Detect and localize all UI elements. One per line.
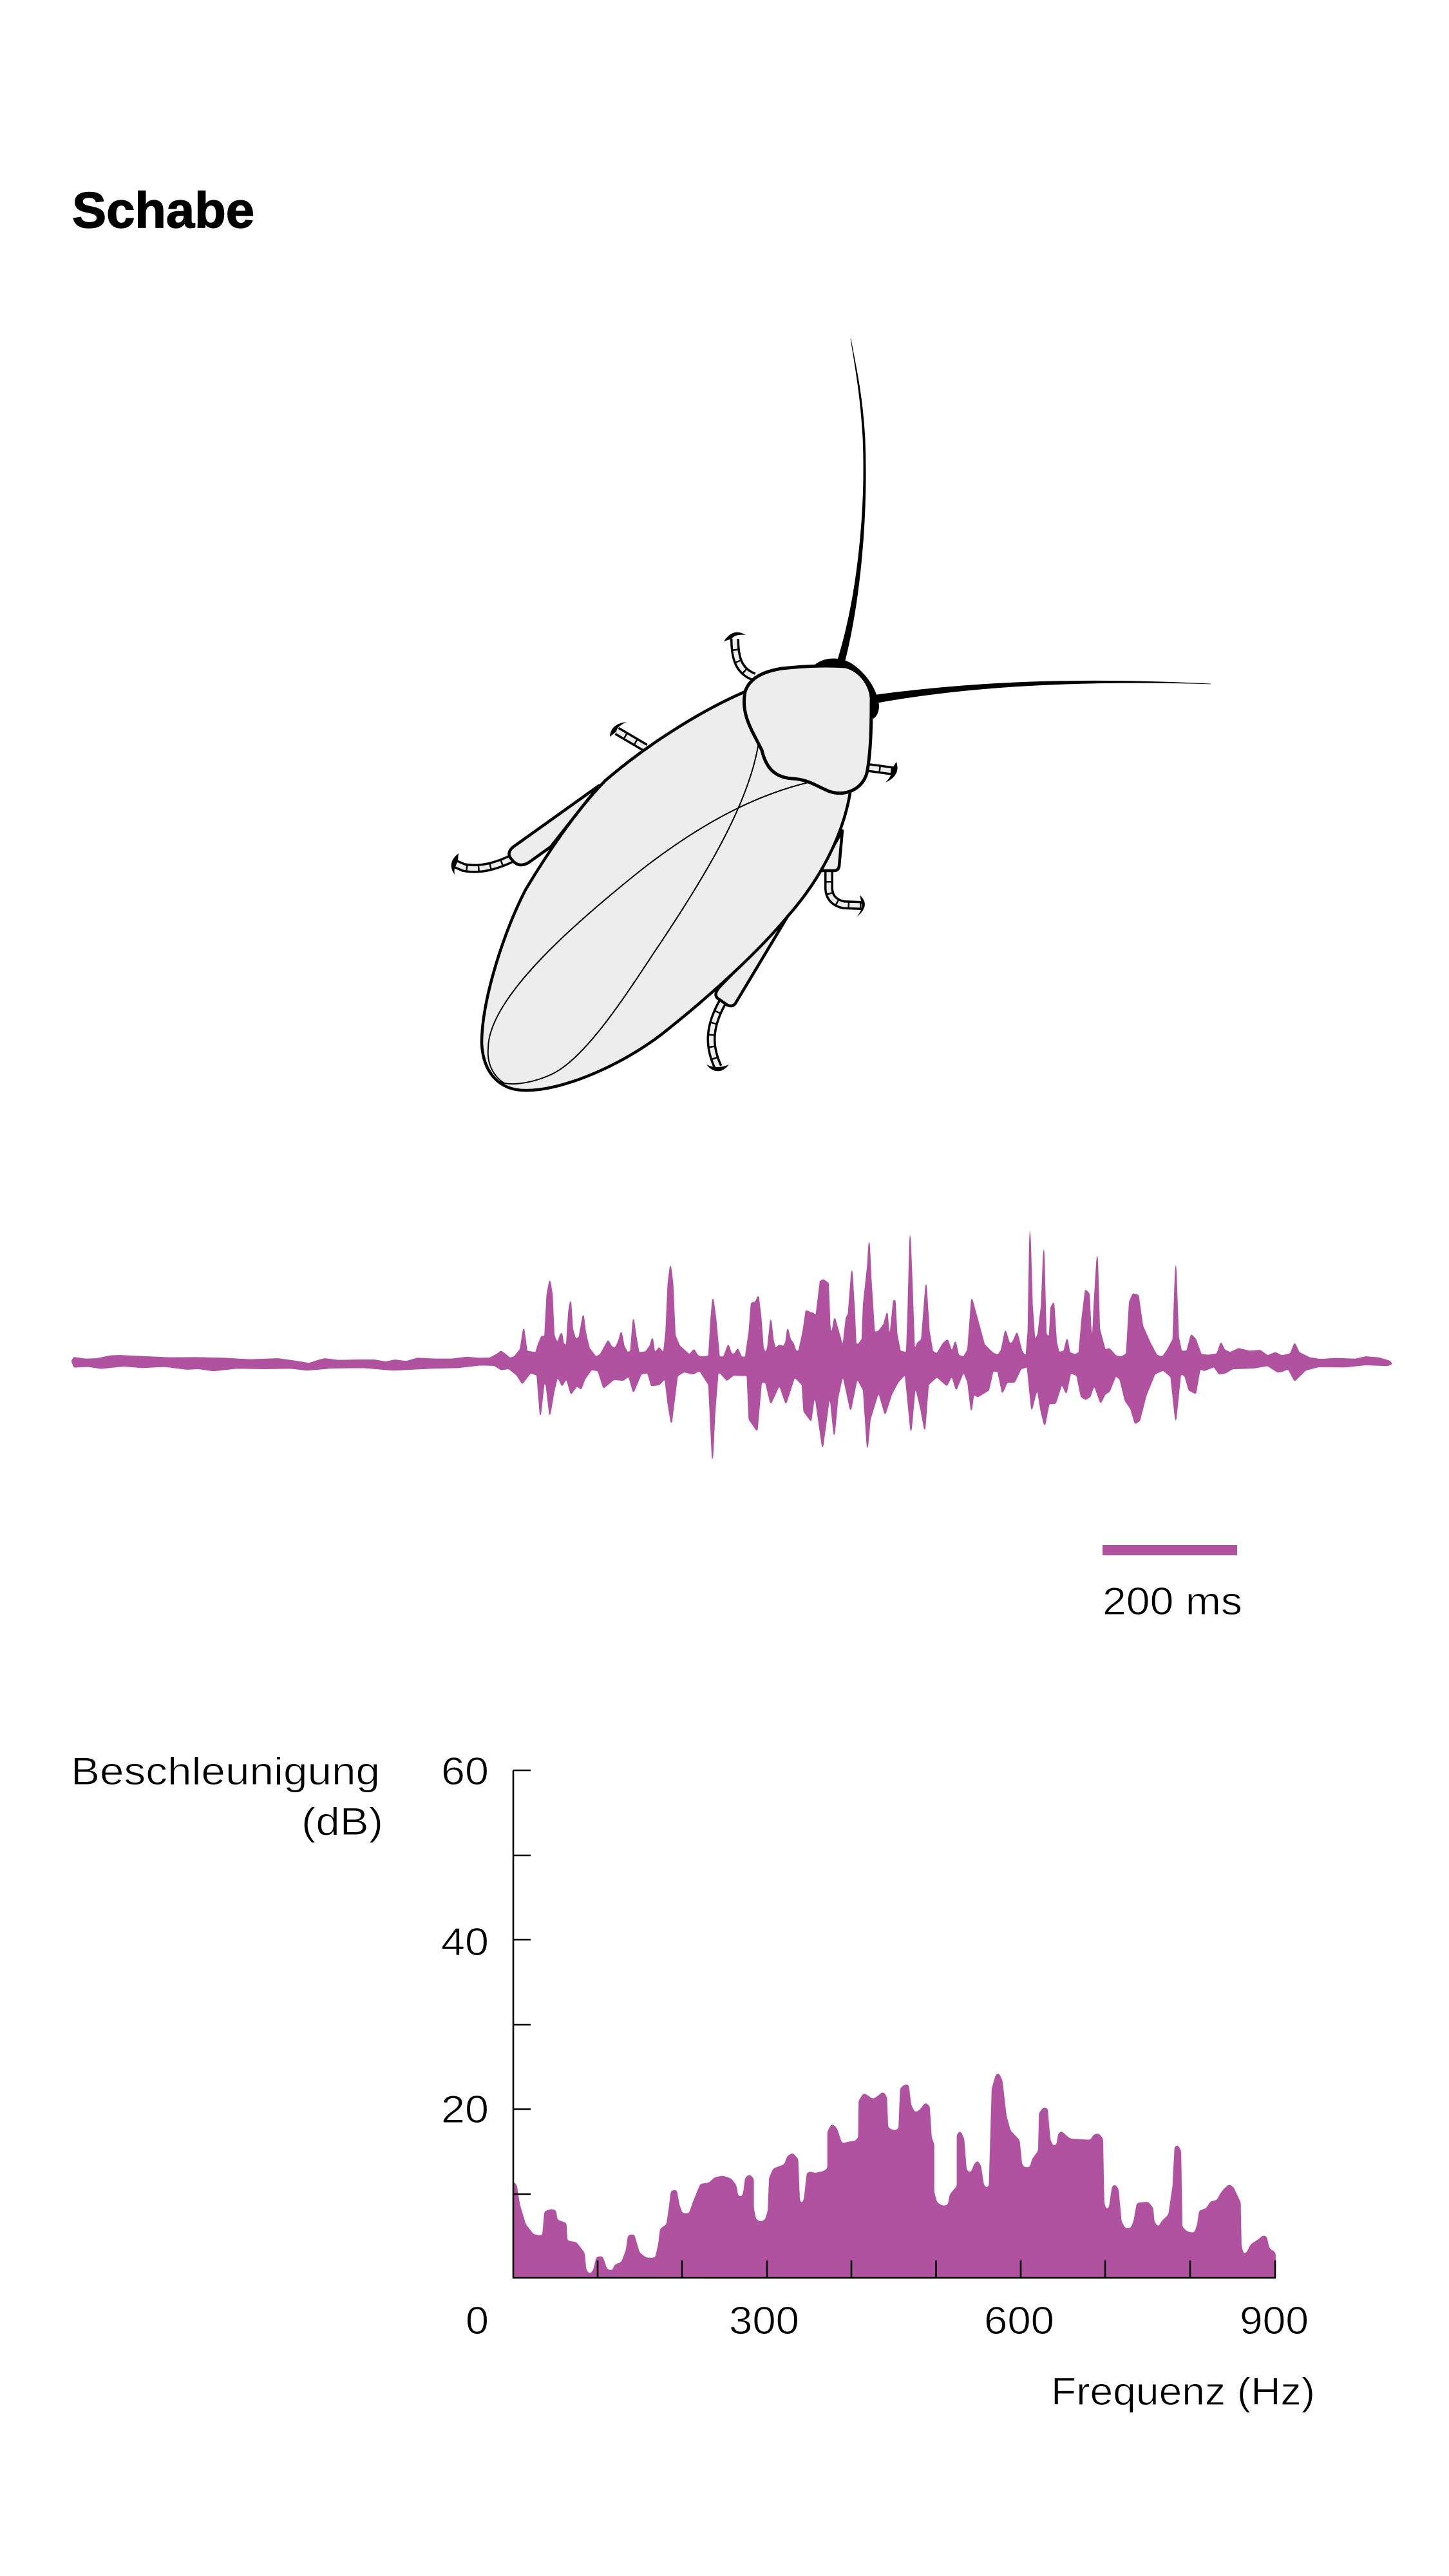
y axis title: (dB) [301, 1800, 383, 1843]
scale bar: 200 ms [1103, 1545, 1242, 1623]
wing vein: diagonal [488, 782, 808, 1083]
leg: front right [869, 762, 898, 782]
wings [482, 692, 851, 1090]
y axis labels: 40 [441, 1920, 489, 1964]
y axis title [71, 1750, 383, 1843]
waveform chart [72, 1231, 1392, 1460]
head [813, 658, 879, 719]
spectrum chart [71, 1750, 1315, 2413]
x axis labels: 300 [729, 2299, 799, 2342]
x axis title: Frequenz (Hz) [1051, 2370, 1315, 2413]
y axis labels [441, 1750, 489, 2131]
leg: hind left [451, 786, 599, 875]
axes and ticks [513, 1770, 1276, 2278]
scale label: 200 ms [1103, 1580, 1242, 1623]
x axis labels: 600 [984, 2299, 1054, 2342]
waveform: left part [72, 1265, 750, 1460]
y axis labels: 20 [441, 2088, 489, 2131]
x axis labels: 900 [1240, 2299, 1309, 2342]
spectrum area [513, 2074, 1275, 2278]
illustration: cockroach [451, 339, 1211, 1090]
waveform: right part [746, 1231, 1392, 1448]
leg: front left [724, 632, 754, 677]
title: Schabe [72, 182, 254, 238]
antenna: upward [838, 339, 866, 661]
y axis title: Beschleunigung [71, 1750, 380, 1793]
leg: middle left [610, 722, 645, 748]
x axis labels: 0 [466, 2299, 489, 2342]
wing vein: long [498, 743, 759, 1084]
leg: hind right [706, 916, 788, 1071]
leg: middle right [819, 831, 865, 917]
x axis labels [466, 2299, 1309, 2342]
antenna: sideways [876, 681, 1211, 703]
pronotum [744, 666, 871, 793]
y axis labels: 60 [441, 1750, 489, 1793]
